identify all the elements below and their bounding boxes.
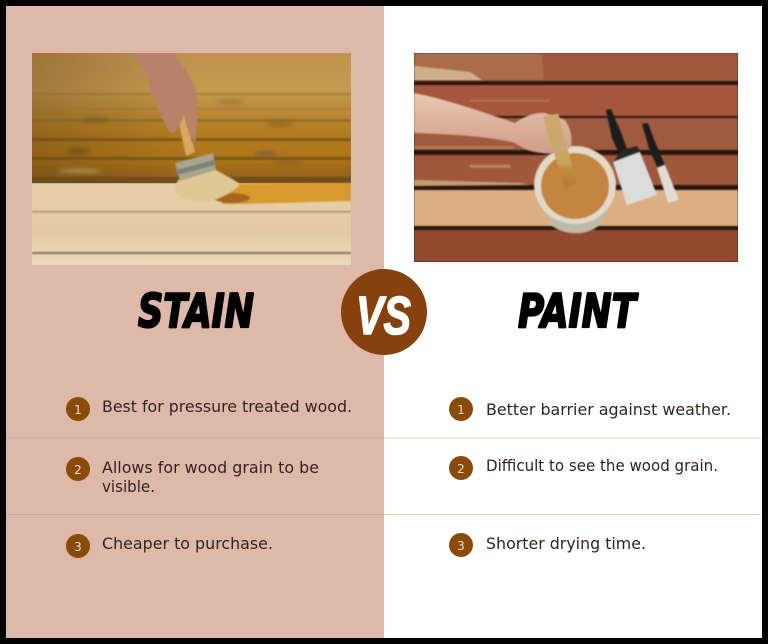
item: stain 3: 3 bbox=[74, 540, 82, 554]
badge: VS: VS bbox=[356, 286, 411, 346]
paint can bbox=[534, 146, 616, 233]
brush bbox=[174, 113, 240, 203]
heading: stain: STAIN bbox=[138, 284, 254, 338]
item: stain 2 bbox=[66, 457, 319, 496]
hand bbox=[130, 53, 197, 143]
item: stain 3 bbox=[66, 534, 273, 558]
panel: stain bbox=[6, 6, 384, 638]
item: stain 1: 1 bbox=[74, 403, 82, 417]
item: stain 2: Allows for wood grain to be bbox=[102, 458, 319, 477]
item: stain 1: Best for pressure treated wood. bbox=[102, 397, 352, 416]
arm and hand bbox=[414, 93, 571, 154]
item: stain 3: Cheaper to purchase. bbox=[102, 534, 273, 553]
item: paint 3 bbox=[449, 533, 646, 557]
item: stain 2: visible. bbox=[102, 477, 155, 496]
heading: paint: PAINT bbox=[518, 284, 639, 338]
photo: hand stirring paint can on deck boards bbox=[414, 53, 738, 262]
panel: paint bbox=[414, 53, 738, 557]
item: paint 2 bbox=[449, 456, 718, 480]
item: paint 2: 2 bbox=[457, 462, 465, 476]
item: paint 1 bbox=[449, 397, 731, 421]
item: paint 3: 3 bbox=[457, 539, 465, 553]
large brush bbox=[606, 109, 657, 205]
small brush bbox=[642, 123, 679, 203]
item: paint 1: 1 bbox=[457, 403, 465, 417]
item: paint 3: Shorter drying time. bbox=[486, 534, 646, 553]
stir stick bbox=[550, 114, 576, 188]
item: paint 1: Better barrier against weather. bbox=[486, 400, 731, 419]
item: stain 1 bbox=[66, 397, 352, 421]
item: stain 2: 2 bbox=[74, 463, 82, 477]
item: paint 2: Difficult to see the wood grain. bbox=[486, 456, 718, 475]
photo: brush applying stain to wood deck bbox=[32, 53, 351, 265]
badge: VS bbox=[341, 269, 427, 355]
